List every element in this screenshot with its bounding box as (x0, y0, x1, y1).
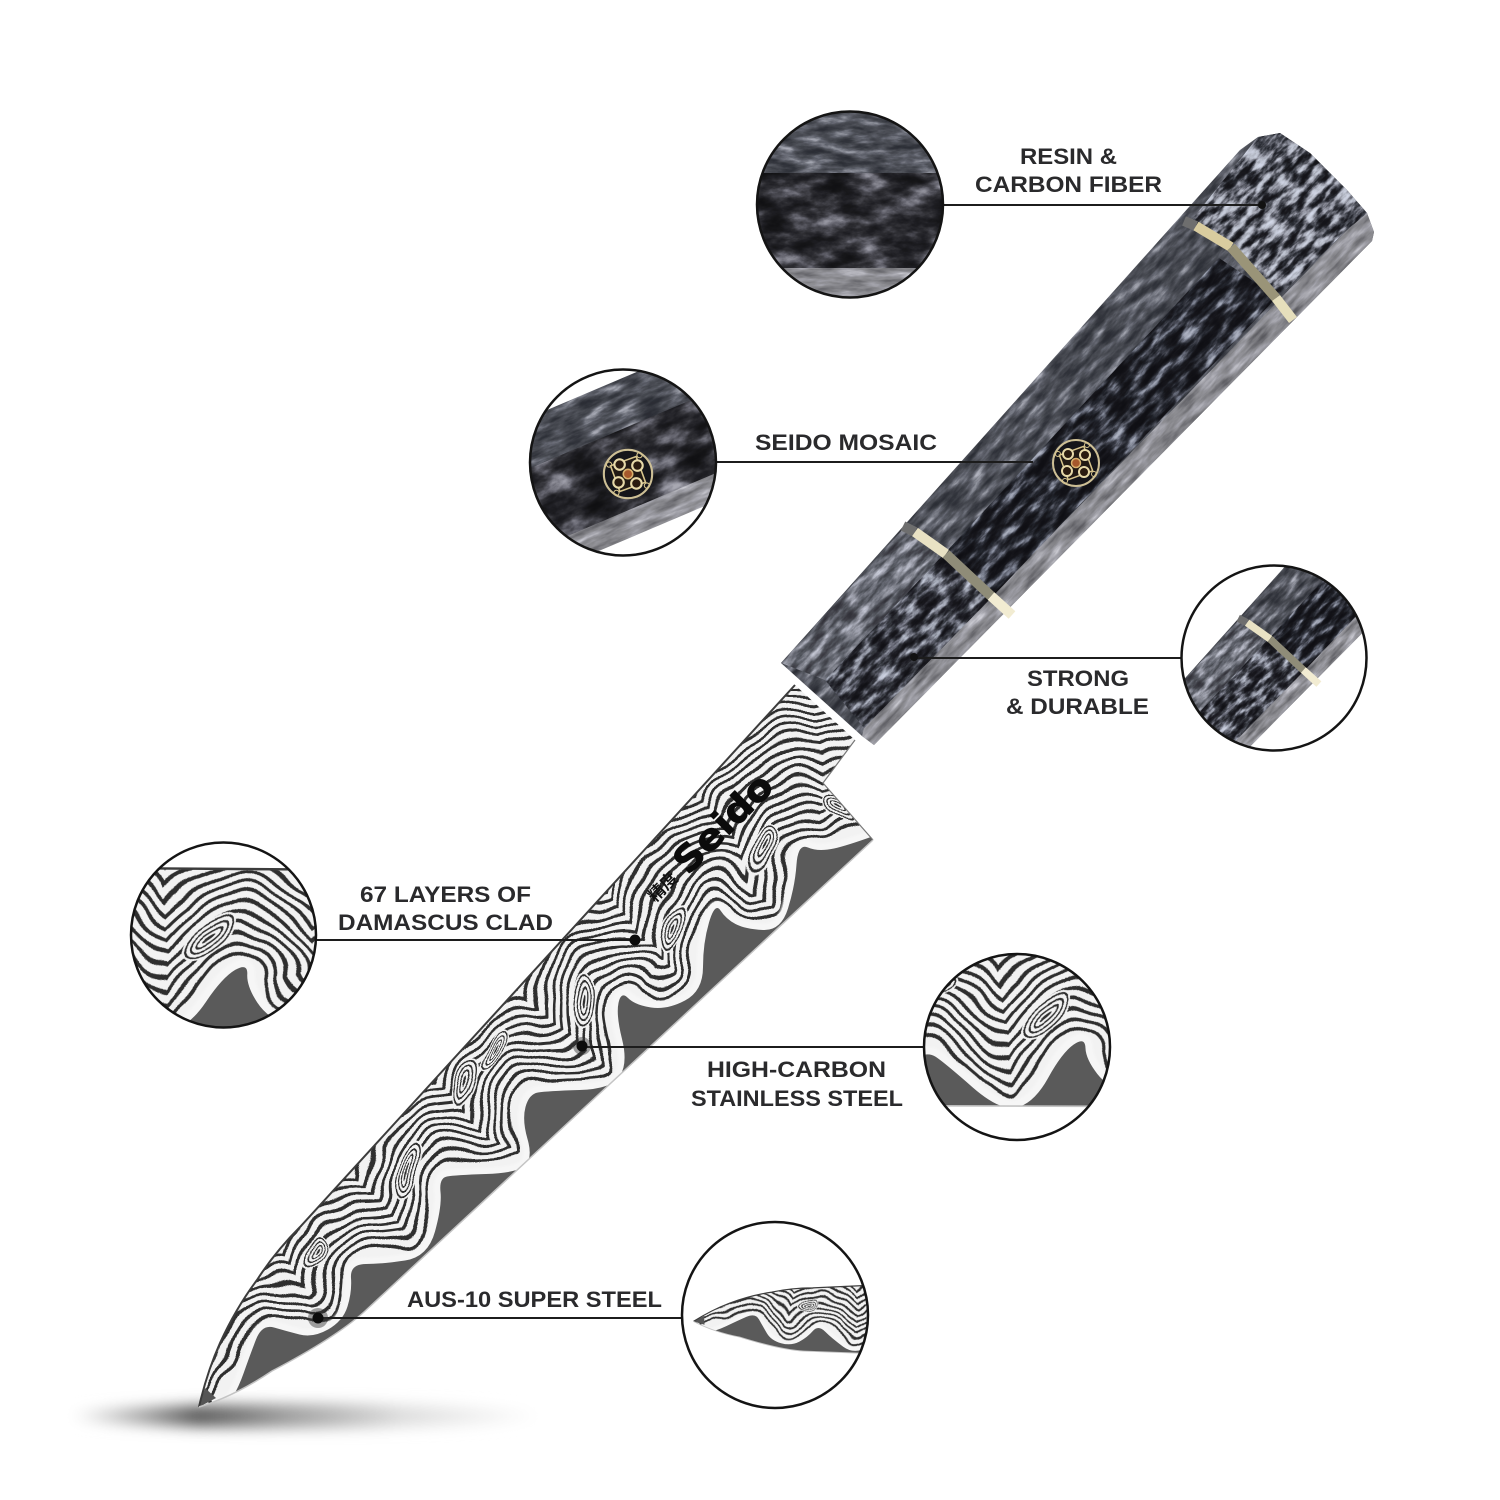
label (338, 882, 553, 935)
ground shadow (69, 1404, 541, 1428)
zoom circle: mosaic rivet (528, 368, 718, 557)
zoom circle: steel core (922, 952, 1112, 1142)
callout: strong and durable (910, 564, 1368, 752)
leader line (317, 939, 635, 941)
leader dot (308, 1308, 328, 1328)
leader dot: resin (1258, 201, 1266, 209)
label: SEIDO MOSAIC (755, 430, 937, 455)
callout: resin and carbon fiber (750, 105, 1262, 303)
label: STAINLESS STEEL (691, 1086, 903, 1111)
leader line (716, 461, 1033, 463)
knife handle (524, 0, 1500, 1035)
knife blade (100, 600, 950, 1490)
leader line (914, 657, 1182, 659)
callout: aus-10 super steel (308, 1220, 870, 1410)
label (975, 144, 1162, 197)
zoom circle: damascus layers (130, 841, 318, 1029)
label: HIGH-CARBON (707, 1057, 886, 1082)
label: RESIN & (1020, 144, 1117, 169)
label: STRONG (1027, 666, 1129, 691)
callout: 67 layers of damascus clad (130, 841, 640, 1029)
label: & DURABLE (1006, 694, 1149, 719)
blade logo: kanji: 精度 (641, 865, 683, 907)
label (691, 1057, 903, 1111)
leader dot (910, 653, 918, 661)
label: AUS-10 SUPER STEEL (407, 1287, 662, 1312)
label (1006, 666, 1149, 719)
label: DAMASCUS CLAD (338, 910, 553, 935)
zoom circle: blade tip (680, 1220, 870, 1410)
zoom circle: resin (750, 105, 950, 303)
leader dot (630, 934, 640, 946)
callout: high-carbon stainless steel (573, 952, 1112, 1142)
zoom circle: bolster (1180, 564, 1368, 752)
label: 67 LAYERS OF (360, 882, 531, 907)
leader line (943, 204, 1262, 206)
label: CARBON FIBER (975, 172, 1162, 197)
callout: seido mosaic (528, 368, 1033, 557)
leader line (318, 1317, 684, 1319)
blade logo: Seido: Seido (665, 766, 782, 882)
leader dot (573, 1037, 591, 1055)
leader line (582, 1046, 925, 1048)
